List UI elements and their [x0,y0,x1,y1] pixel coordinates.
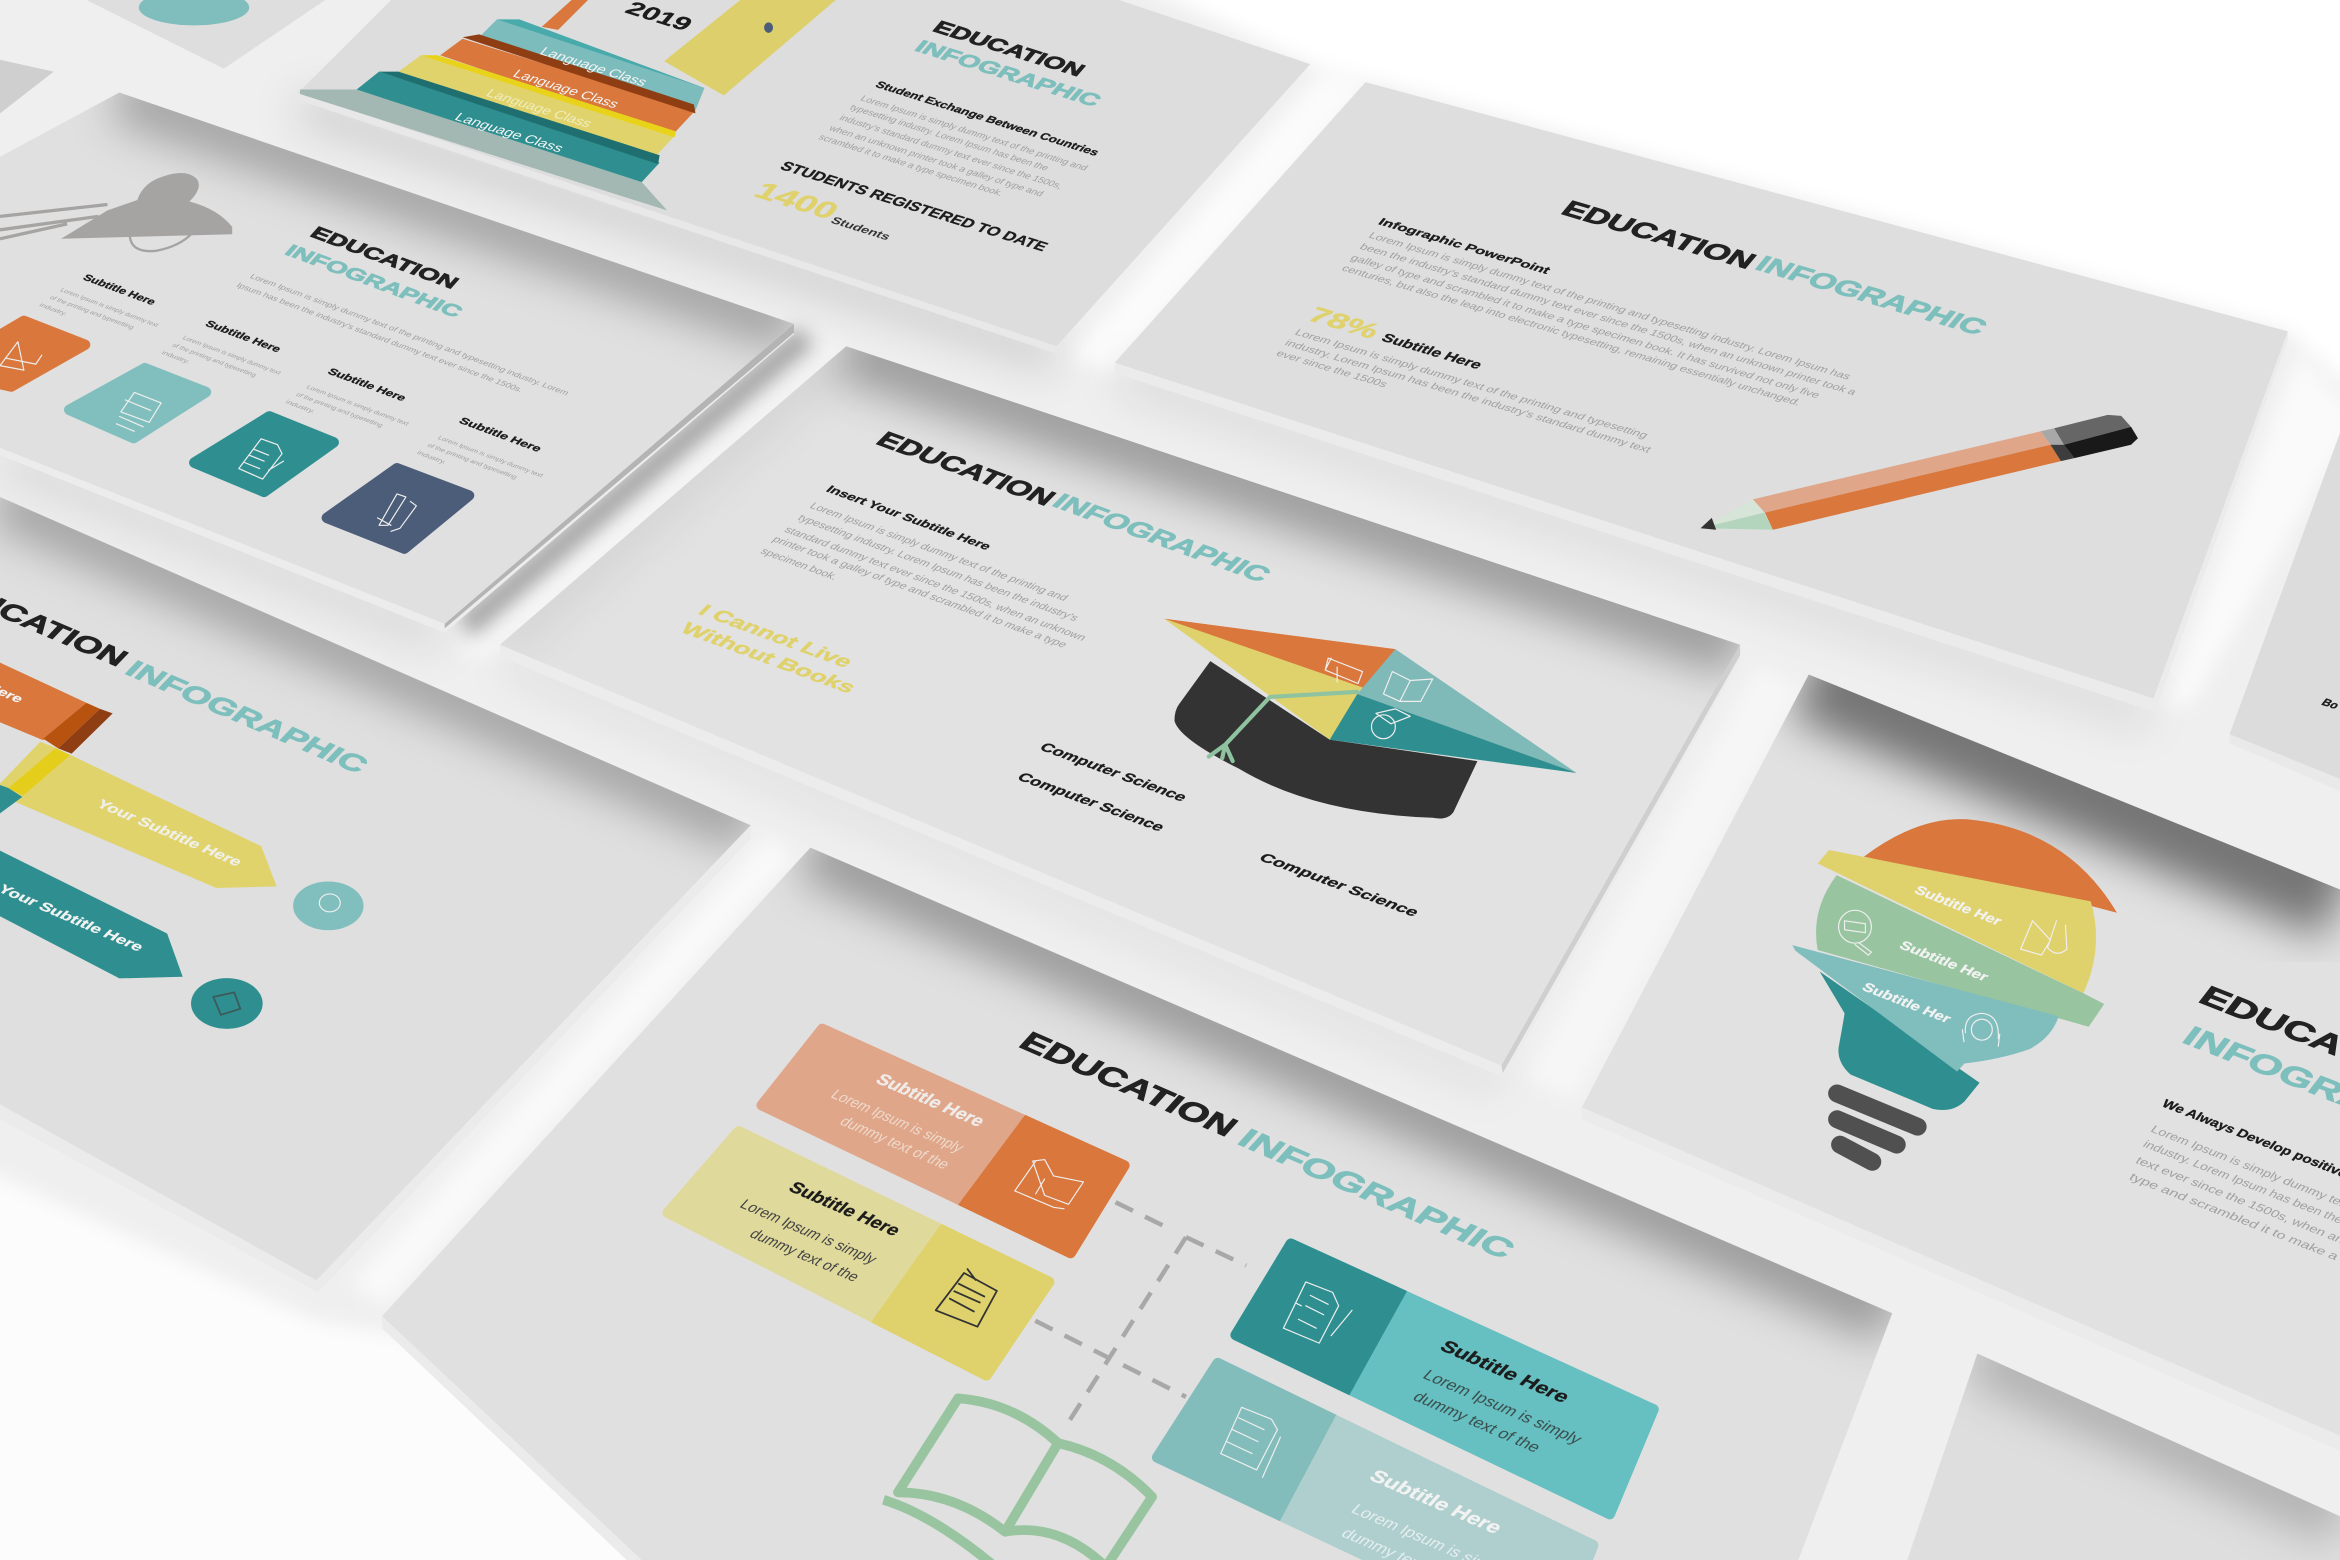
lamp [0,173,232,251]
subtitle and body: typesetting industry. Lorem Ipsum has been the [847,103,1051,173]
title [0,568,375,778]
subtitle and body [2126,1097,2340,1301]
1400 stat: Students [828,215,893,242]
card: yellow [668,1131,1049,1375]
slide: lamp and four icon squares [0,93,794,633]
title [2176,981,2340,1156]
slide: bottom right empty [1907,1354,2340,1560]
step labels [452,44,651,155]
bulb labels [1859,883,2006,1026]
intro text [1339,216,1859,408]
intro body: Lorem Ipsum is simply dummy text of the printing and typesetting industry. Lorem [248,272,571,397]
graduation cap [1164,619,1577,819]
bulb labels: Subtitle Her [1911,883,2006,928]
column 2 text: of the printing and typesetting [170,343,258,379]
column 4 text: of the printing and typesetting [426,443,519,481]
step labels: Language Class [537,44,651,89]
card: yellow: Lorem Ipsum is simply [736,1197,880,1267]
stat body: Lorem Ipsum is simply dummy text of the printing and typesetting [1292,328,1651,441]
title: INFOGRAPHIC [119,656,375,778]
78 percent stat [1302,303,1486,372]
bulb labels: Subtitle Her [1896,938,1992,984]
title: INFOGRAPHIC [1231,1124,1521,1265]
students registered: STUDENTS REGISTERED TO DATE [776,159,1051,254]
icon square light teal [69,368,206,438]
door [664,0,836,96]
title [910,18,1105,111]
card: peach and orange [762,1029,1124,1253]
subtitle and body: when an unknown printer took a galley of type and [825,124,1046,199]
column 3 text: of the printing and typesetting [294,392,385,429]
labels [1014,741,1422,920]
light teal circle icon [293,882,364,930]
78 percent stat: 78% [1302,303,1386,343]
pencil [1701,415,2138,530]
step teal [357,72,660,182]
subtitle and body: Lorem Ipsum is simply dummy text of the printing and [807,501,1070,603]
subtitle and body: Student Exchange Between Countries [873,80,1101,158]
slide: far right fragment [2230,433,2340,791]
card: teal: dummy text of the [1409,1389,1544,1456]
step labels: Language Class [452,110,567,155]
column 2 text: Lorem Ipsum is simply dummy text [181,335,282,376]
intro text: been the industry's standard dummy text ever since the 1500s, when an unknown printer took a [1357,242,1859,398]
column 2 text: industry. [160,350,191,365]
column 1 text: Subtitle Here [80,273,158,307]
teal circle icon [191,978,263,1029]
slide: connected cards and book [382,848,1892,1560]
title: EDUCATION [306,224,463,293]
dashed connectors [1035,1202,1246,1422]
quote [676,602,861,697]
title: EDUCATION [870,428,1061,510]
bulb labels: Subtitle Her [1859,980,1955,1026]
door knob [764,22,773,33]
step light teal [479,19,704,110]
1400 stat [748,177,893,242]
subtitle and body: Insert Your Subtitle Here [823,483,994,552]
step orange [440,34,695,134]
subtitle and body: We Always Develop positive [2159,1097,2340,1180]
bulb icons [1839,910,2067,1046]
ground shadows [0,107,2149,1080]
yellow arrow: Your Subtitle Here [93,797,245,869]
step labels: Language Class [483,86,596,130]
slide: graduation cap [500,346,1740,1077]
subtitle and body: scrambled it to make a type specimen book. [816,133,1005,198]
stairs base [300,90,667,210]
slide: far top-left fragment [0,0,325,113]
slide: arrows [0,497,751,1292]
title: INFOGRAPHIC [1750,252,1992,340]
slide: language class stairs [298,0,1310,354]
slide: light bulb [1582,675,2340,1451]
subtitle and body: Lorem Ipsum is simply dummy text of the printing and [858,94,1090,173]
card: peach and orange: dummy text of the [836,1114,953,1172]
teal arrow [0,851,183,978]
column 4 text: Lorem Ipsum is simply dummy text [436,435,544,479]
column 3 text: Lorem Ipsum is simply dummy text [305,384,410,427]
card: peach and orange: Subtitle Here [872,1070,989,1130]
title: INFOGRAPHIC [1046,490,1276,587]
card: peach and orange: Lorem Ipsum is simply [827,1087,967,1156]
column 3 text: Subtitle Here [325,367,408,403]
quote: I Cannot Live [693,602,857,671]
subtitle and body [758,483,1089,650]
title [280,224,467,322]
orange bar [0,639,113,754]
column 4 text: industry. [415,450,448,466]
yellow arrow [0,742,277,888]
stat body: industry. Lorem Ipsum has been the industry's standard dummy text [1282,338,1654,455]
title: EDUCATION [928,18,1089,80]
column 3 text [284,367,410,429]
column 1 text: Lorem Ipsum is simply dummy text [58,287,160,329]
title [870,428,1276,587]
book outline [883,1398,1152,1560]
intro text: Infographic PowerPoint [1376,216,1553,276]
card: teal [1236,1244,1654,1514]
subtitle and body: standard dummy text ever since the 1500s, when an unknown [781,525,1089,643]
stat body [1273,328,1654,455]
subtitle and body: specimen book. [758,547,840,582]
column 3 text: industry. [284,399,316,415]
title: INFOGRAPHIC [280,241,467,322]
title: INFOGRAPHIC [910,37,1105,111]
quote: Without Books [676,619,861,697]
column 2 text [160,319,283,379]
title [1556,197,1992,340]
column 1 text: of the printing and typesetting [48,295,135,331]
card: yellow: dummy text of the [746,1227,863,1285]
card: yellow: Subtitle Here [785,1178,905,1239]
card: light teal: Subtitle Here [1365,1466,1507,1538]
subtitle and body: typesetting industry. Lorem Ipsum has been the industry's [795,513,1081,624]
icon square teal [194,416,334,492]
1400 stat: 1400 [748,177,845,224]
intro text: galley of type and scrambled it to make a type specimen book. It has survived not only five [1348,253,1823,401]
subtitle and body: printer took a galley of type and scrambled it to make a type [769,535,1070,650]
step labels: Language Class [510,67,623,111]
title [1012,1027,1521,1265]
labels: Computer Science [1255,851,1422,920]
labels: Computer Science [1036,741,1190,804]
card: teal: Lorem Ipsum is simply [1419,1367,1586,1448]
column 1 text [38,273,160,331]
step yellow [398,55,676,155]
subtitle and body: industry's standard dummy text ever since the 1500s, [837,113,1065,191]
pole [542,0,588,30]
labels: Computer Science [1014,771,1168,834]
card: teal: Subtitle Here [1436,1336,1575,1406]
slide: pencil and 78 percent [1115,82,2288,712]
title: EDUCATION [1556,197,1761,274]
title: EDUCATION [1012,1027,1244,1142]
column 2 text: Subtitle Here [203,319,283,355]
column 4 text [415,416,544,481]
icon square orange [0,321,85,387]
bulb [1792,819,2117,1162]
column 4 text: Subtitle Here [456,416,544,454]
icon square navy [327,468,469,549]
stat body: ever since the 1500s [1273,348,1390,390]
subtitle and body [816,80,1101,199]
card: light teal [1157,1363,1593,1560]
column 1 text: industry. [38,302,69,317]
78 percent stat: Subtitle Here [1379,330,1486,372]
intro text: Lorem Ipsum is simply dummy text of the printing and typesetting industry. Lorem Ipsum has [1366,231,1853,382]
intro body: Ipsum has been the industry's standard dummy text ever since the 1500s. [235,281,526,394]
intro text: centuries, but also the leap into electronic typesetting, remaining essentially unchanged. [1339,263,1804,408]
